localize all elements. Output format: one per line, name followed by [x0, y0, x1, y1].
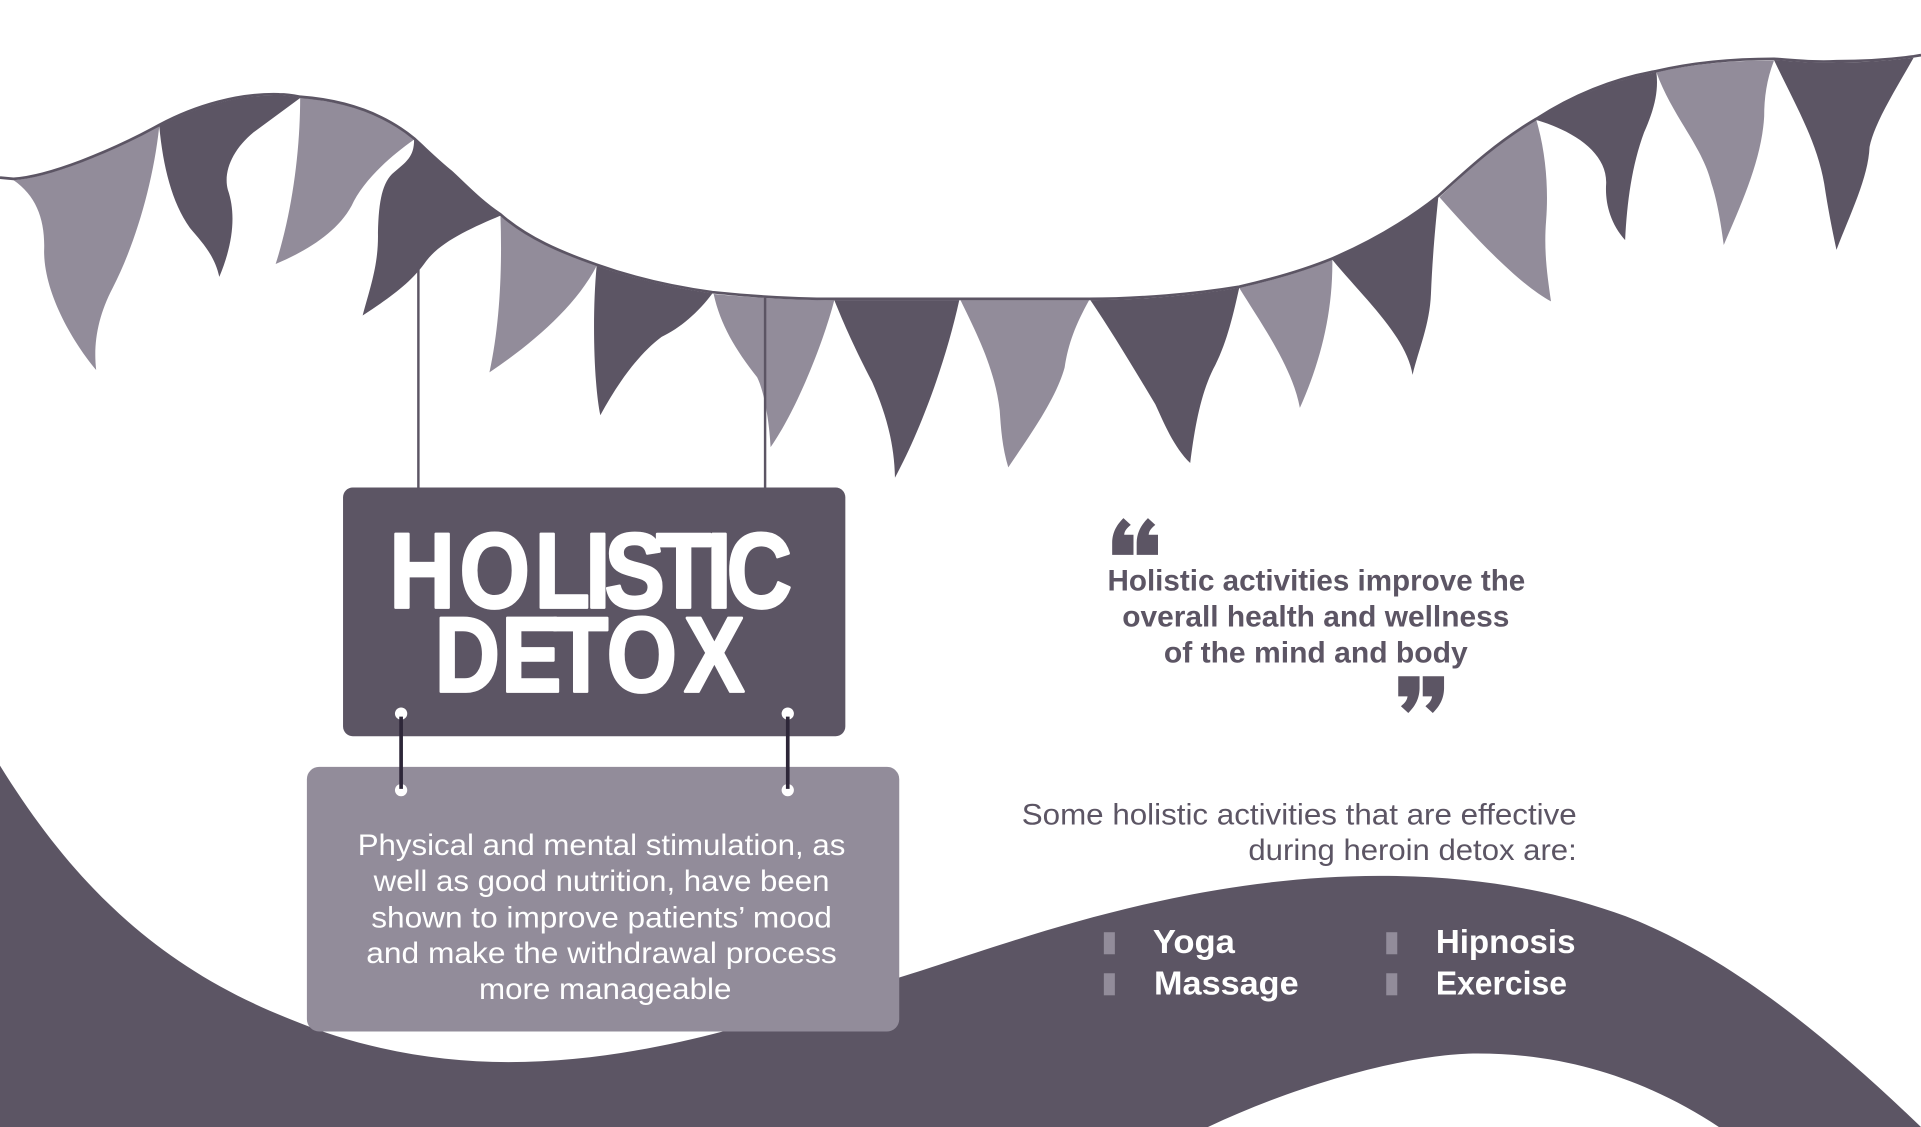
activities intro text: during heroin detox are: [1248, 834, 1577, 867]
quote text: of the mind and body [1164, 637, 1468, 670]
quote text [1108, 564, 1525, 670]
flag 16 [1774, 58, 1914, 250]
activity labels: Hipnosis [1436, 924, 1576, 961]
quote text: overall health and wellness [1122, 601, 1509, 634]
activities intro text [1022, 798, 1577, 867]
title: holistic detox [389, 511, 792, 714]
activities intro text: Some holistic activities that are effective [1022, 798, 1577, 831]
bunting garland [0, 55, 1921, 478]
activity labels [1153, 924, 1576, 1003]
flag 3 [276, 98, 414, 264]
flag 14 [1536, 72, 1657, 240]
background wave [0, 766, 1921, 1127]
flag 4 [363, 140, 500, 315]
description text: Physical and mental stimulation, as [358, 829, 845, 862]
flag 2 [159, 95, 300, 277]
description text: shown to improve patients’ mood [371, 901, 832, 934]
description text [358, 829, 845, 1006]
flag 15 [1656, 61, 1774, 245]
icon: closing quotation mark [1398, 676, 1444, 713]
flag 8 [834, 300, 959, 478]
activity labels: Exercise [1436, 966, 1567, 1003]
quote text: Holistic activities improve the [1108, 564, 1525, 597]
icon: opening quotation mark [1112, 518, 1158, 555]
title: holistic detox: HOLISTIC [389, 511, 792, 630]
activities list [1104, 924, 1576, 1003]
flag 9 [960, 300, 1089, 467]
activity labels: Yoga [1153, 924, 1235, 961]
flag 7 [714, 294, 834, 447]
description panel [307, 767, 899, 1031]
flag 10 [1090, 288, 1239, 463]
connectors between signs [395, 707, 794, 796]
description text: well as good nutrition, have been [373, 865, 829, 898]
flag 13 [1440, 120, 1551, 301]
flag 5 [489, 216, 597, 372]
activity labels: Massage [1154, 966, 1299, 1003]
title: holistic detox: DETOX [435, 595, 745, 714]
flag 11 [1239, 260, 1332, 408]
flag 1 [13, 126, 159, 370]
flag 6 [594, 266, 712, 415]
sign hanging cords [418, 267, 765, 490]
bullet markers [1104, 932, 1397, 995]
description text: more manageable [479, 973, 731, 1006]
title sign panel [343, 488, 845, 736]
bunting string [0, 55, 1921, 299]
flag 12 [1332, 197, 1438, 375]
description text: and make the withdrawal process [366, 937, 837, 970]
